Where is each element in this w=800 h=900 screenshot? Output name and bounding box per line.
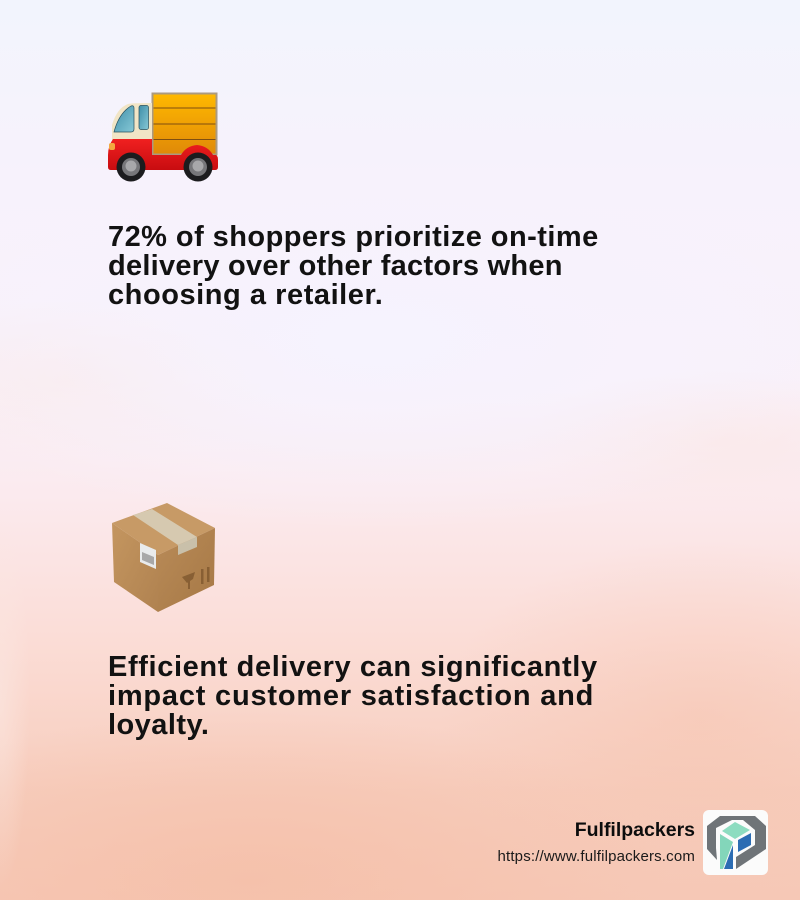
logo [703, 810, 768, 875]
text: customer satisfaction statement: Efficient delivery can significantly [108, 651, 598, 683]
website url: https://www.fulfilpackers.com [498, 848, 695, 865]
brand name: Fulfilpackers [575, 819, 695, 841]
text: customer satisfaction statement: impact customer satisfaction and [108, 680, 594, 712]
text: on-time delivery statistic: 72% of shoppers prioritize on-time [108, 221, 599, 253]
text: customer satisfaction statement: loyalty. [108, 709, 209, 741]
icon: delivery truck [108, 92, 218, 182]
text: on-time delivery statistic [108, 221, 599, 311]
icon: cardboard box [112, 503, 215, 612]
text: on-time delivery statistic: delivery over other factors when [108, 250, 563, 282]
text: customer satisfaction statement [108, 651, 598, 741]
cargo box [152, 92, 218, 156]
text: on-time delivery statistic: choosing a retailer. [108, 279, 383, 311]
red chassis and wheels [108, 139, 218, 182]
cab [112, 103, 152, 141]
